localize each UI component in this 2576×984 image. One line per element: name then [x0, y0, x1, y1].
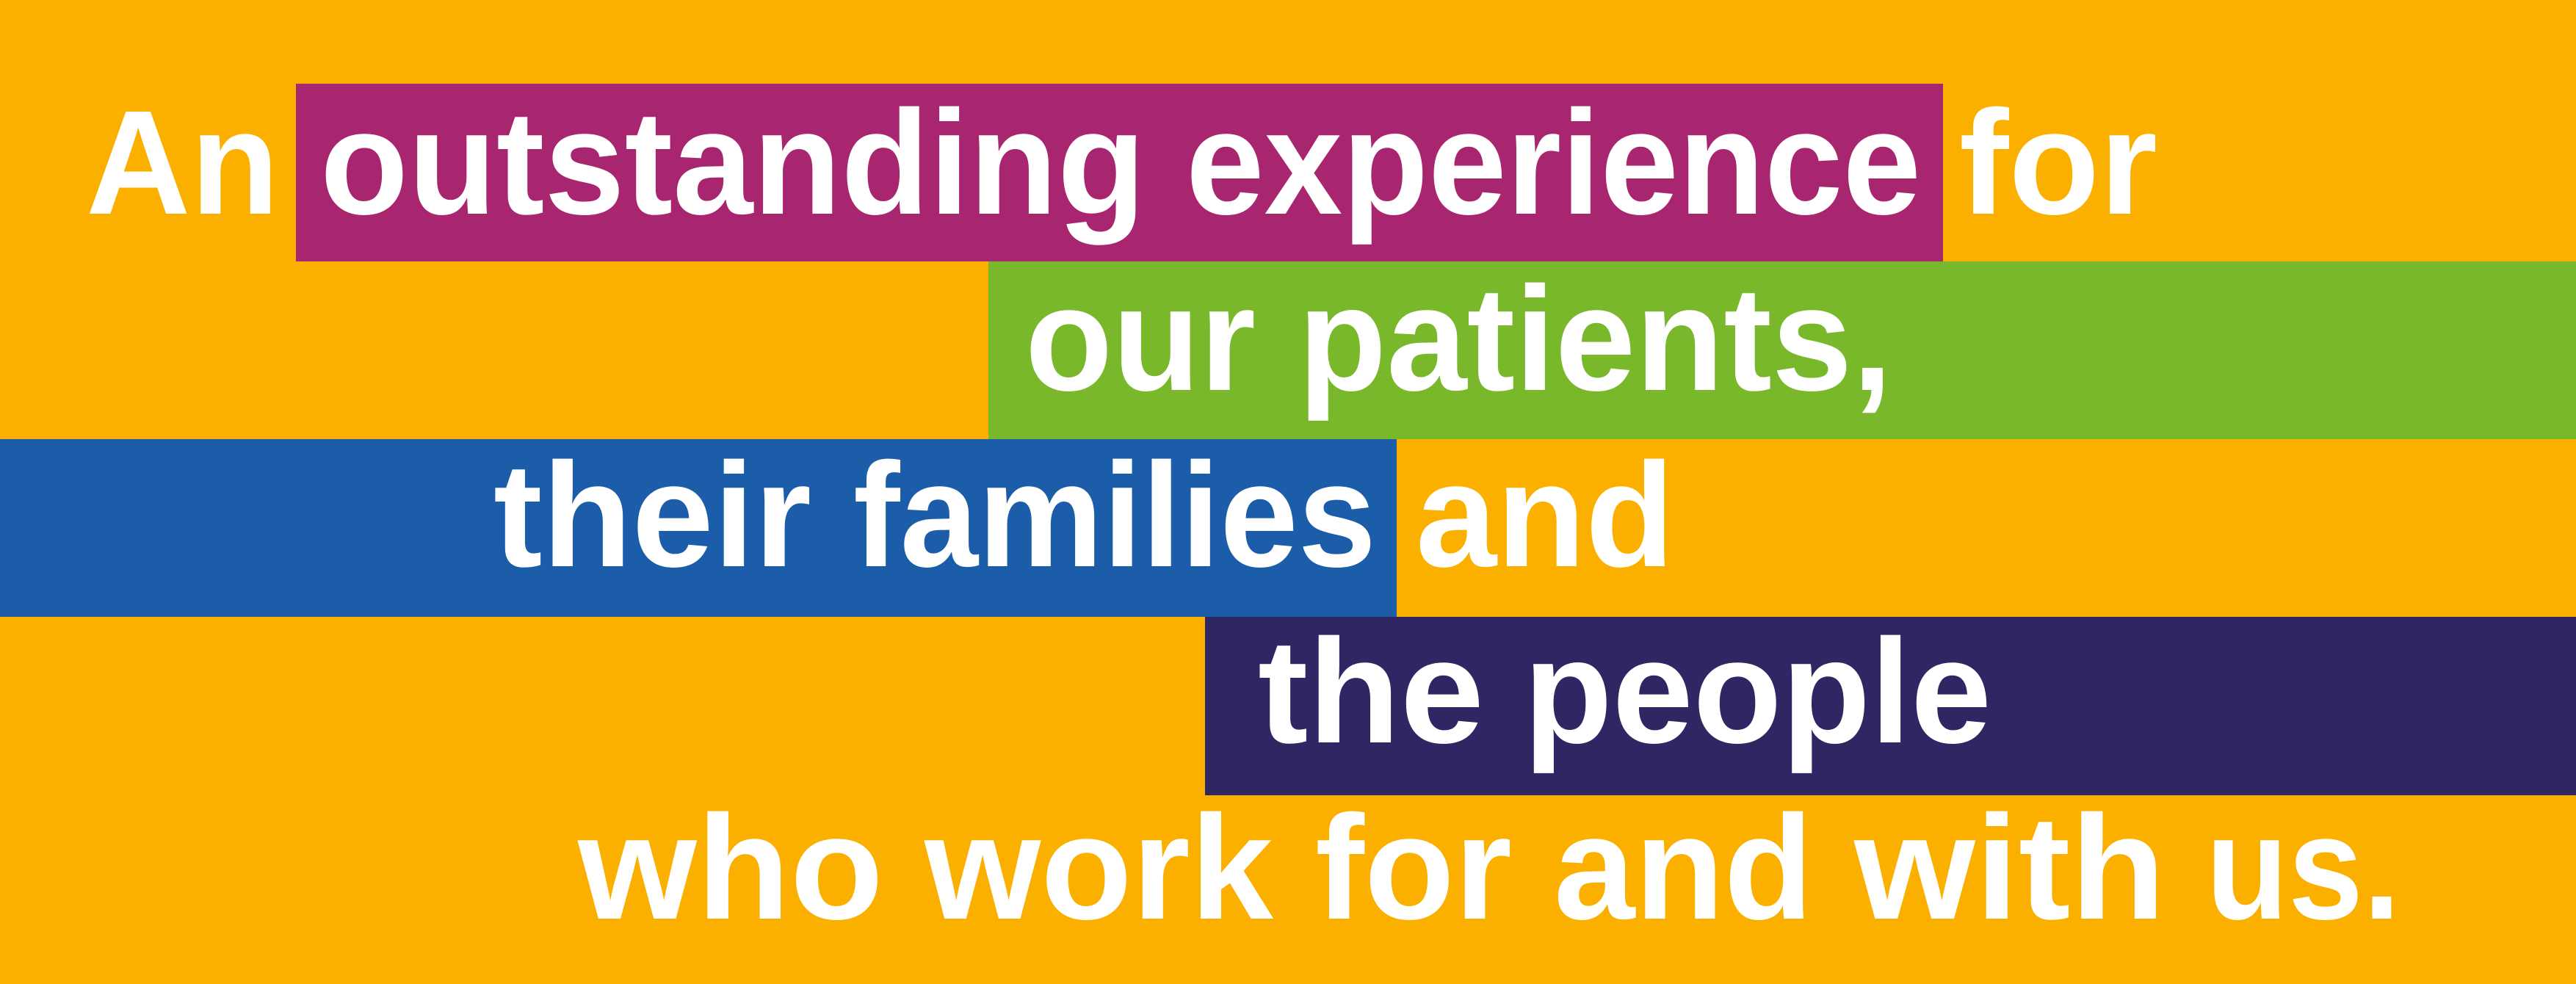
text: our patients,: patients, [1298, 256, 1892, 422]
text: and: and [1416, 432, 1674, 598]
text: who work for and with us.: for [1315, 784, 1512, 950]
panel: blue highlight [0, 439, 1397, 617]
text: the people: people [1524, 608, 1991, 774]
text: outstanding experience: experience [1186, 79, 1921, 245]
text: their families: families [853, 432, 1376, 598]
text: our patients, [1025, 256, 1892, 422]
text: who work for and with us.: and [1554, 784, 1813, 950]
panel: green highlight [988, 261, 2576, 439]
text: who work for and with us. [577, 784, 2400, 950]
text: outstanding experience [320, 79, 1921, 245]
text: who work for and with us.: us. [2206, 784, 2400, 950]
text: who work for and with us.: with [1853, 784, 2166, 950]
text: who work for and with us.: work [924, 784, 1274, 950]
text: for: for [1959, 79, 2157, 245]
panel: magenta highlight [296, 84, 1943, 261]
text: the people [1258, 608, 1991, 774]
text: our patients,: our [1025, 256, 1256, 422]
text: outstanding experience: outstanding [320, 79, 1146, 245]
text: their families [493, 432, 1376, 598]
text: An: An [86, 79, 279, 245]
text: their families: their [493, 432, 811, 598]
text: the people: the [1258, 608, 1484, 774]
text: who work for and with us.: who [577, 784, 883, 950]
panel: navy highlight [1205, 617, 2576, 795]
